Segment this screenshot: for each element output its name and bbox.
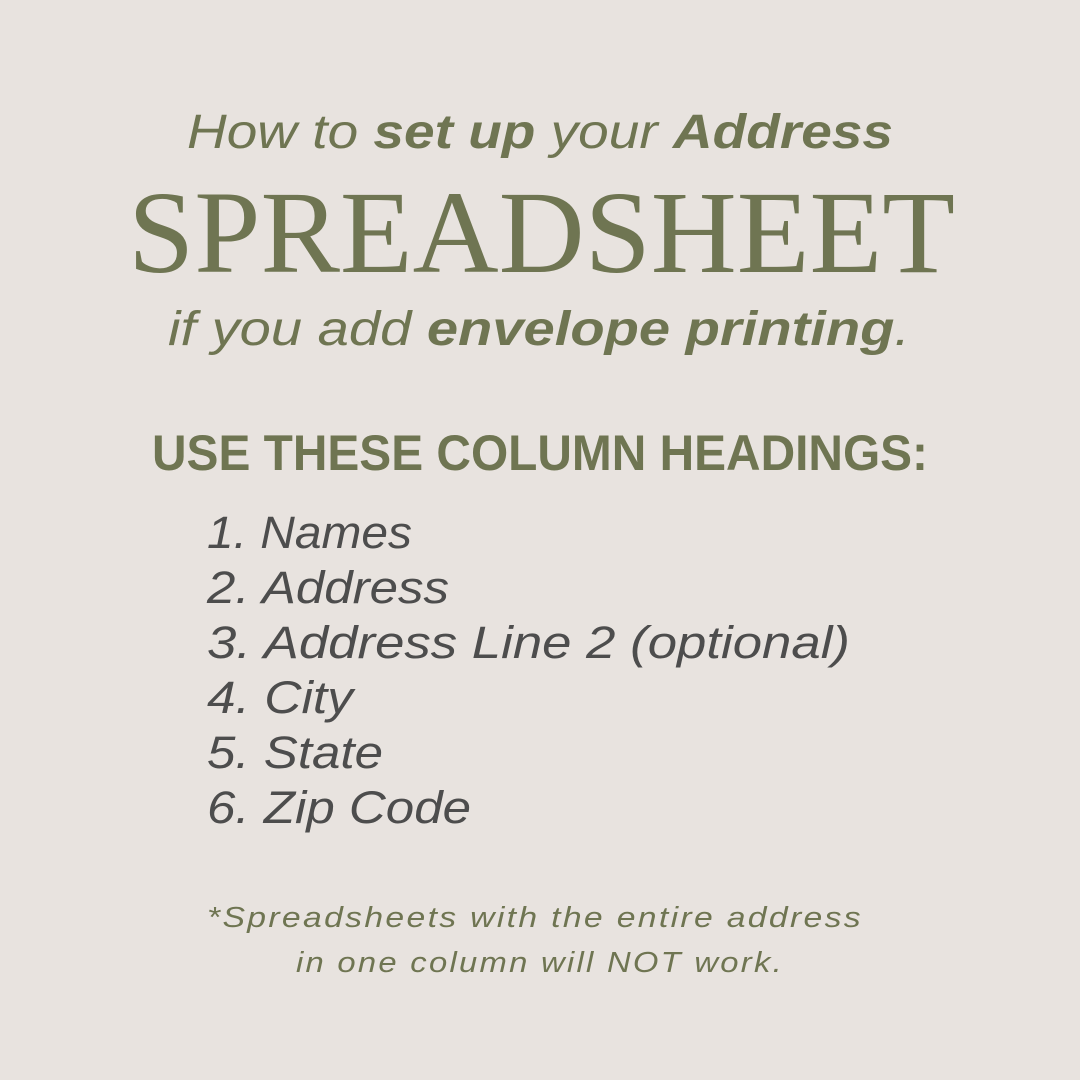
list of column headings: 2. Address xyxy=(206,562,449,613)
footnote xyxy=(207,902,863,979)
heading: column headings: USE THESE COLUMN HEADINGS: xyxy=(152,425,928,481)
title line 1: How to set up your Address xyxy=(187,106,893,159)
list of column headings: 5. State xyxy=(207,727,383,778)
list of column headings: 3. Address Line 2 (optional) xyxy=(207,617,850,668)
title line 3: if you add envelope printing . xyxy=(168,303,910,356)
list of column headings: 1. Names xyxy=(207,507,412,558)
footnote: *Spreadsheets with the entire address xyxy=(207,902,863,934)
list of column headings xyxy=(206,507,850,833)
list of column headings: 4. City xyxy=(207,672,356,723)
footnote: in one column will NOT work. xyxy=(296,947,784,979)
title: SPREADSHEET: SPREADSHEET xyxy=(128,167,955,298)
list of column headings: 6. Zip Code xyxy=(207,782,471,833)
